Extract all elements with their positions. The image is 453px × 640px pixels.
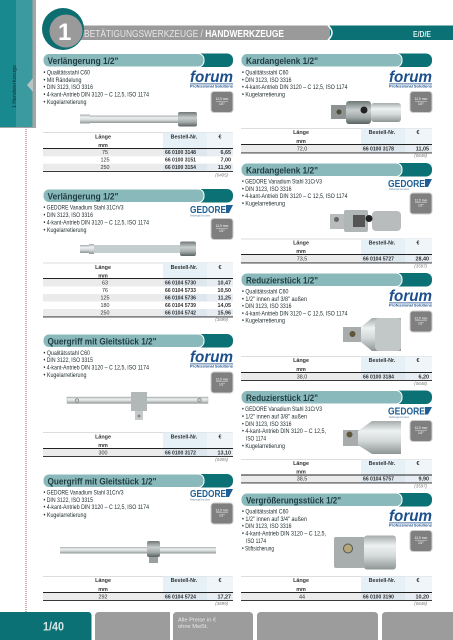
table: (0405) [215, 172, 229, 178]
badge: drive size [211, 372, 233, 393]
logo: GEDORE: Werkzeuge fürs Leben [389, 187, 409, 191]
bullet list: • DIN 3123, ISO 3316 [242, 187, 292, 193]
page number tab [0, 612, 92, 640]
bullet list [242, 407, 326, 450]
table: € [416, 240, 420, 246]
bullet list: • DIN 3123, ISO 3316 [242, 78, 292, 84]
table: mm [98, 143, 108, 149]
table: 66 0100 3172 [165, 450, 196, 456]
table: 66 0100 3190 [363, 594, 394, 600]
badge: drive size [211, 218, 233, 240]
badge: drive size: 12,5 mm [415, 198, 428, 202]
panel: Quergriff forum [43, 334, 233, 462]
table: € [218, 265, 222, 271]
logo: forum: Professional Solutions [389, 524, 432, 528]
bullet list [44, 206, 150, 234]
table: 66 0104 5757 [363, 476, 394, 482]
table: € [416, 578, 420, 584]
table: 14,05 [218, 303, 231, 309]
table: 66 0104 5739 [165, 303, 196, 309]
badge: drive size: 12,5 mm [216, 224, 229, 228]
badge: drive size: 12,5 mm [415, 536, 428, 540]
table: 76 [102, 288, 108, 294]
table: 180 [100, 303, 110, 309]
table: mm [98, 274, 108, 280]
badge: drive size [211, 503, 233, 524]
logo: GEDORE: Werkzeuge fürs Leben [389, 415, 409, 419]
bullet list: • 4-kant-Antrieb DIN 3120 – C 12,5, ISO 1174 [242, 312, 348, 318]
panel: Verlängerung GEDORE [43, 189, 233, 322]
table: 66 0104 5730 [165, 280, 196, 286]
table [241, 356, 432, 386]
table: 125 [100, 296, 110, 302]
table: 75 [102, 150, 108, 156]
bullet list: • GEDORE Vanadium Stahl 31CrV3 [242, 407, 323, 413]
table: 66 0100 3148 [165, 150, 196, 156]
badge: drive size [410, 92, 432, 112]
heading: Reduzierstück 1/2" [246, 392, 318, 403]
tool: reducer [343, 421, 401, 454]
badge: drive size: 1/2" [219, 514, 225, 518]
logo: forum: Professional Solutions [389, 84, 432, 88]
table: 66 0100 3184 [363, 374, 394, 380]
bullet list: • Kugelarretierung [44, 513, 86, 519]
heading [241, 390, 432, 404]
chapter title: BETÄTIGUNGSWERKZEUGE / HANDWERKZEUGE [84, 28, 284, 40]
table [241, 238, 432, 268]
table: 44 [299, 594, 305, 600]
table: mm [296, 139, 306, 145]
panel: Quergriff GEDORE [43, 474, 233, 606]
table: Bestell-Nr. [171, 134, 198, 140]
badge: drive size: 1/2" [219, 382, 225, 386]
sidebar tab: 1 Handwerkzeuge [12, 65, 18, 108]
bullet list: ISO 1174 [246, 539, 267, 545]
table: Länge [95, 134, 111, 140]
logo: GEDORE: GEDORE [388, 406, 425, 418]
table [241, 128, 432, 158]
table: Länge [293, 461, 309, 467]
table: 66 0104 5727 [363, 256, 394, 262]
bullet list: • DIN 3123, ISO 3316 [242, 422, 292, 428]
tool: reducer [343, 318, 401, 351]
badge: drive size: 1/2" [219, 102, 225, 106]
chapter number circle: 1 [58, 19, 71, 46]
bullet list: • 1/2" innen auf 3/8" außen [242, 297, 307, 303]
panel: Kardangelenk forum [241, 54, 432, 158]
table: mm [296, 367, 306, 373]
badge: drive size: 12,5 mm [415, 316, 428, 320]
bullet list: • 4-kant-Antrieb DIN 3120 – C 12,5, ISO 1174 [242, 85, 348, 91]
table: € [218, 434, 222, 440]
logo: GEDORE: GEDORE [190, 488, 226, 500]
table: 10,20 [416, 594, 429, 600]
table: 15,96 [218, 310, 231, 316]
bullet list: • DIN 3122, ISO 3315 [44, 358, 94, 364]
logo: forum: forum [389, 288, 432, 305]
badge: drive size [410, 420, 432, 442]
badge: drive size: 12,5 mm [216, 97, 229, 101]
table: Bestell-Nr. [171, 265, 198, 271]
bullet list: • Qualitätsstahl C60 [44, 351, 91, 357]
table: Bestell-Nr. [171, 578, 198, 584]
chapter number circle [42, 8, 84, 50]
badge: drive size: 12,5 mm [216, 378, 229, 382]
badge: drive size [410, 193, 432, 214]
logo: forum: Professional Solutions [190, 364, 233, 368]
bullet list: • 1/2" innen auf 3/4" außen [242, 517, 307, 523]
tool: sliding T-handle [60, 541, 216, 563]
badge: drive size: 1/2" [418, 431, 424, 435]
badge: drive size: 12,5 mm [216, 508, 229, 512]
table: 63 [102, 280, 108, 286]
table: 72,0 [297, 146, 307, 152]
table: (0648) [414, 601, 428, 606]
badge: drive size [211, 92, 233, 112]
table [43, 262, 233, 322]
table: Bestell-Nr. [369, 358, 396, 364]
bullet list: • 4-kant-Antrieb DIN 3120 – C 12,5, ISO 1174 [44, 220, 150, 226]
heading [241, 493, 432, 506]
badge: drive size: 1/2" [418, 102, 424, 106]
bullet list: • DIN 3123, ISO 3316 [44, 213, 94, 219]
table: mm [296, 470, 306, 476]
badge: drive size: 1/2" [219, 229, 225, 233]
table: 7,00 [220, 158, 231, 164]
bullet list: • Kugelarretierung [44, 373, 86, 379]
badge: drive size: 1/2" [418, 204, 424, 208]
bullet list: • Kugelarretierung [242, 202, 285, 208]
panel: Reduzierstück forum [241, 273, 432, 386]
table: 17,27 [218, 594, 231, 600]
tool: adapter [334, 536, 396, 570]
heading: Quergriff mit Gleitstück 1/2" [48, 336, 156, 346]
bullet list: • 1/2" innen auf 3/8" außen [242, 414, 307, 420]
table: (3597) [414, 264, 428, 268]
bullet list [44, 351, 150, 379]
bullet list [242, 510, 326, 552]
table: 11,25 [218, 296, 231, 302]
table: Länge [293, 240, 309, 246]
bullet list: • Kugelarretierung [44, 228, 86, 234]
tool: extension bar [80, 242, 196, 256]
logo: forum: forum [389, 69, 432, 86]
bullet list: ISO 1174 [246, 436, 267, 442]
table: 125 [100, 158, 110, 164]
table: (0648) [414, 381, 428, 386]
table: 10,47 [218, 280, 231, 286]
table: 66 0100 3178 [363, 146, 394, 152]
bullet list: • 4-kant-Antrieb DIN 3120 – C 12,5, ISO 1174 [44, 366, 150, 372]
logo: forum: forum [389, 508, 432, 525]
table: 292 [98, 594, 108, 600]
table: 250 [100, 165, 110, 171]
bullet list: • DIN 3123, ISO 3316 [44, 85, 94, 91]
table: (0648) [414, 153, 428, 158]
bullet list: • 4-kant-Antrieb DIN 3120 – C 12,5, ISO 1174 [44, 92, 150, 98]
heading [43, 189, 233, 202]
logo: forum: Professional Solutions [190, 84, 233, 88]
heading [241, 163, 432, 176]
logo: forum: Professional Solutions [389, 304, 432, 308]
bullet list: • GEDORE Vanadium Stahl 31CrV3 [44, 490, 124, 496]
table: 66 0100 3151 [165, 158, 196, 164]
bullet list: • Kugelarretierung [242, 92, 285, 98]
table: 66 0100 3154 [165, 165, 196, 171]
table: Länge [95, 265, 111, 271]
table: (3699) [215, 317, 229, 322]
table: Länge [293, 578, 309, 584]
bullet list: • Kugelarretierung [44, 100, 86, 106]
bullet list: • GEDORE Vanadium Stahl 31CrV3 [242, 180, 323, 186]
table: Länge [293, 130, 309, 136]
badge: drive size [410, 311, 432, 332]
table: 66 0104 5736 [165, 296, 196, 302]
bullet list [44, 70, 150, 106]
table: 38,0 [297, 374, 307, 380]
table: € [218, 578, 222, 584]
heading: Kardangelenk 1/2" [246, 164, 318, 176]
logo: forum: forum [190, 69, 233, 86]
table: 66 0104 5742 [165, 310, 196, 316]
table: Bestell-Nr. [369, 240, 396, 246]
dotted margin line [25, 127, 27, 640]
tool: sliding T-handle [67, 392, 208, 420]
table: mm [296, 587, 306, 593]
table: 6,65 [220, 150, 231, 156]
logo: GEDORE: Werkzeuge fürs Leben [190, 498, 210, 502]
table: (3597) [414, 484, 428, 488]
panel: Verlängerung forum [43, 54, 233, 178]
sidebar tab [0, 0, 36, 128]
table: Länge [95, 578, 111, 584]
price note: Alle Preise in € [178, 618, 217, 624]
panel: Reduzierstück GEDORE [241, 390, 432, 488]
bullet list: • Qualitätsstahl C60 [242, 70, 289, 76]
table: 6,20 [418, 374, 429, 380]
table: (0405) [215, 457, 229, 462]
tool: universal joint [331, 101, 401, 124]
bullet list [44, 490, 150, 519]
bullet list: • 4-kant-Antrieb DIN 3120 – C 12,5, [242, 532, 326, 538]
bullet list: • DIN 3122, ISO 3315 [44, 498, 94, 504]
page number tab: 1/40 [43, 622, 64, 634]
table: 66 0104 5733 [165, 288, 196, 294]
table [43, 432, 233, 462]
table: 73,5 [297, 256, 307, 262]
badge: drive size [410, 530, 432, 552]
table: € [416, 130, 420, 136]
bullet list: • 4-kant-Antrieb DIN 3120 – C 12,5, [242, 429, 326, 435]
table: 38,5 [297, 476, 307, 482]
table: (3699) [215, 601, 229, 606]
heading [241, 273, 432, 286]
bullet list: • DIN 3123, ISO 3316 [242, 304, 292, 310]
table: € [218, 134, 222, 140]
table: Bestell-Nr. [369, 461, 396, 467]
bullet list: • Qualitätsstahl C60 [44, 70, 91, 76]
bullet list [242, 290, 348, 324]
bullet list: • Qualitätsstahl C60 [242, 290, 289, 296]
heading [43, 54, 233, 67]
panel: Kardangelenk GEDORE [241, 163, 432, 268]
table: 13,10 [218, 450, 231, 456]
bullet list: • Qualitätsstahl C60 [242, 510, 289, 516]
logo: forum: forum [190, 349, 233, 366]
bullet list: • Stiftsicherung [242, 546, 274, 552]
bullet list: • GEDORE Vanadium Stahl 31CrV3 [44, 206, 124, 212]
table: Bestell-Nr. [369, 130, 396, 136]
table: 11,05 [416, 146, 429, 152]
table: 11,90 [218, 165, 231, 171]
table: 300 [98, 450, 108, 456]
badge: drive size: 12,5 mm [415, 97, 428, 101]
table: mm [98, 587, 108, 593]
heading [43, 474, 233, 488]
heading [241, 54, 432, 67]
bullet list: • Mit Rändelung [44, 78, 82, 84]
tool: extension bar [80, 112, 197, 126]
heading: Verlängerung 1/2" [48, 55, 118, 66]
bullet list: • DIN 3123, ISO 3316 [242, 524, 292, 530]
logo: GEDORE: GEDORE [388, 178, 425, 190]
table: 9,90 [418, 476, 429, 482]
price note: ohne MwSt. [178, 624, 208, 630]
table: mm [296, 249, 306, 255]
heading: Vergrößerungsstück 1/2" [246, 494, 341, 506]
chapter header bar [42, 8, 453, 50]
table [241, 576, 432, 606]
bullet list: • 4-kant-Antrieb DIN 3120 – C 12,5, ISO 1174 [242, 194, 348, 200]
table: 10,50 [218, 288, 231, 294]
logo: GEDORE: GEDORE [190, 204, 226, 216]
heading: Kardangelenk 1/2" [246, 55, 318, 66]
bullet list [242, 70, 348, 98]
table: 250 [100, 310, 110, 316]
table: Länge [95, 434, 111, 440]
heading: Verlängerung 1/2" [48, 190, 118, 202]
table: € [416, 461, 420, 467]
bullet list: • Kugelarretierung [242, 318, 285, 324]
language code: E/D/E [413, 30, 432, 39]
panel: Vergrößerungsstück forum [241, 493, 432, 606]
table [43, 576, 233, 606]
table: Länge [293, 358, 309, 364]
footer [0, 612, 453, 640]
bullet list: • 4-kant-Antrieb DIN 3120 – C 12,5, ISO 1174 [44, 505, 150, 511]
table: mm [98, 443, 108, 449]
price note [173, 612, 253, 640]
heading [43, 334, 233, 348]
logo: GEDORE: Werkzeuge fürs Leben [190, 214, 210, 218]
table [241, 459, 432, 488]
table: € [416, 358, 420, 364]
table: Bestell-Nr. [369, 578, 396, 584]
table: 66 0104 5724 [165, 594, 196, 600]
bullet list [242, 180, 348, 208]
tool: universal joint [330, 210, 401, 232]
table [43, 132, 233, 178]
badge: drive size: 1/2" [418, 541, 424, 545]
table: Bestell-Nr. [171, 434, 198, 440]
heading: Quergriff mit Gleitstück 1/2" [48, 476, 156, 486]
badge: drive size: 1/2" [418, 322, 424, 326]
heading: Reduzierstück 1/2" [246, 274, 318, 286]
table: 28,40 [416, 256, 429, 262]
bullet list: • Kugelarretierung [242, 444, 285, 450]
badge: drive size: 12,5 mm [415, 426, 428, 430]
